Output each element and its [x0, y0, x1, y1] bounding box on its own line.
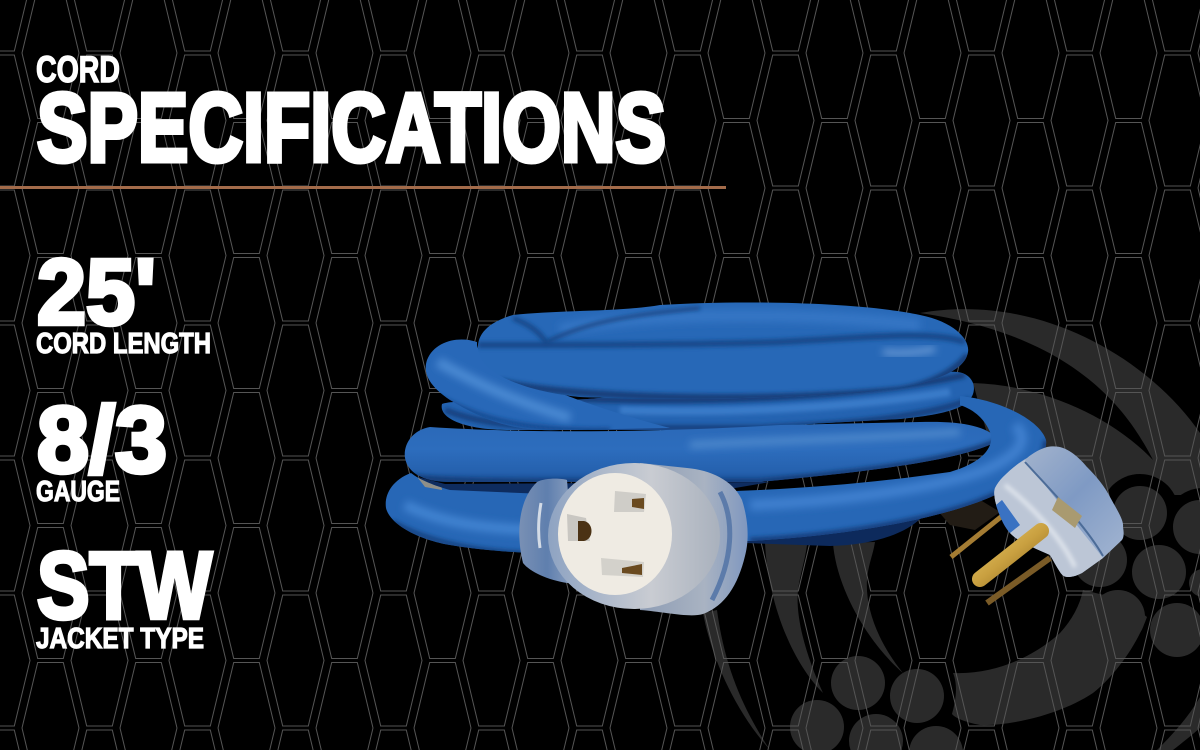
label gauge: GAUGE [36, 476, 120, 508]
cord underside shadow [560, 500, 940, 546]
left slim crescent [703, 610, 770, 750]
bottom-right arc [1157, 697, 1200, 750]
strand gap shading [478, 336, 965, 345]
spec: jacket type [36, 533, 212, 655]
spec: gauge [36, 387, 167, 508]
lower arc [952, 590, 1147, 725]
inner crescent [833, 542, 903, 673]
plug clear rim [994, 460, 1103, 577]
value 8/3: 8/3 [37, 387, 167, 492]
socket neck [519, 479, 575, 583]
socket connector [519, 463, 748, 615]
left loop [426, 340, 670, 430]
front strand highlights [570, 362, 650, 374]
large upper arc [920, 309, 1200, 495]
title main line: SPECIFICATIONS [37, 73, 666, 182]
dark gap between middle and lower coil [418, 477, 770, 496]
ground slot [567, 514, 592, 541]
tag behind plug [938, 498, 1000, 530]
plug connector [951, 446, 1124, 603]
lower slot [601, 558, 644, 577]
plug cap [994, 446, 1124, 577]
watermark logo [703, 309, 1200, 750]
product image: blue extension cord [380, 295, 1124, 615]
value STW: STW [37, 533, 212, 639]
back strand [560, 316, 920, 330]
bottom-left coil [386, 473, 528, 552]
plug pin left [951, 508, 1012, 557]
socket head [548, 463, 720, 609]
dots [790, 486, 1200, 750]
plug pin lower [987, 558, 1050, 603]
plug inner tab [1052, 497, 1082, 528]
socket face [558, 473, 672, 595]
value 25': 25' [37, 240, 156, 344]
second coil [442, 372, 974, 430]
spec: cord length [36, 240, 211, 360]
middle coil [404, 422, 992, 482]
right tail coil [736, 396, 1046, 541]
label cord length: CORD LENGTH [36, 328, 211, 360]
copper divider [0, 186, 726, 189]
title small line: CORD [36, 49, 120, 90]
title [36, 49, 666, 182]
middle crescent [765, 543, 823, 693]
plug pin centre [980, 531, 1041, 579]
socket back cap [640, 463, 748, 615]
top coil [478, 302, 968, 399]
label jacket type: JACKET TYPE [36, 623, 204, 655]
black ring around dots [1101, 474, 1179, 552]
upper slot [614, 491, 646, 512]
